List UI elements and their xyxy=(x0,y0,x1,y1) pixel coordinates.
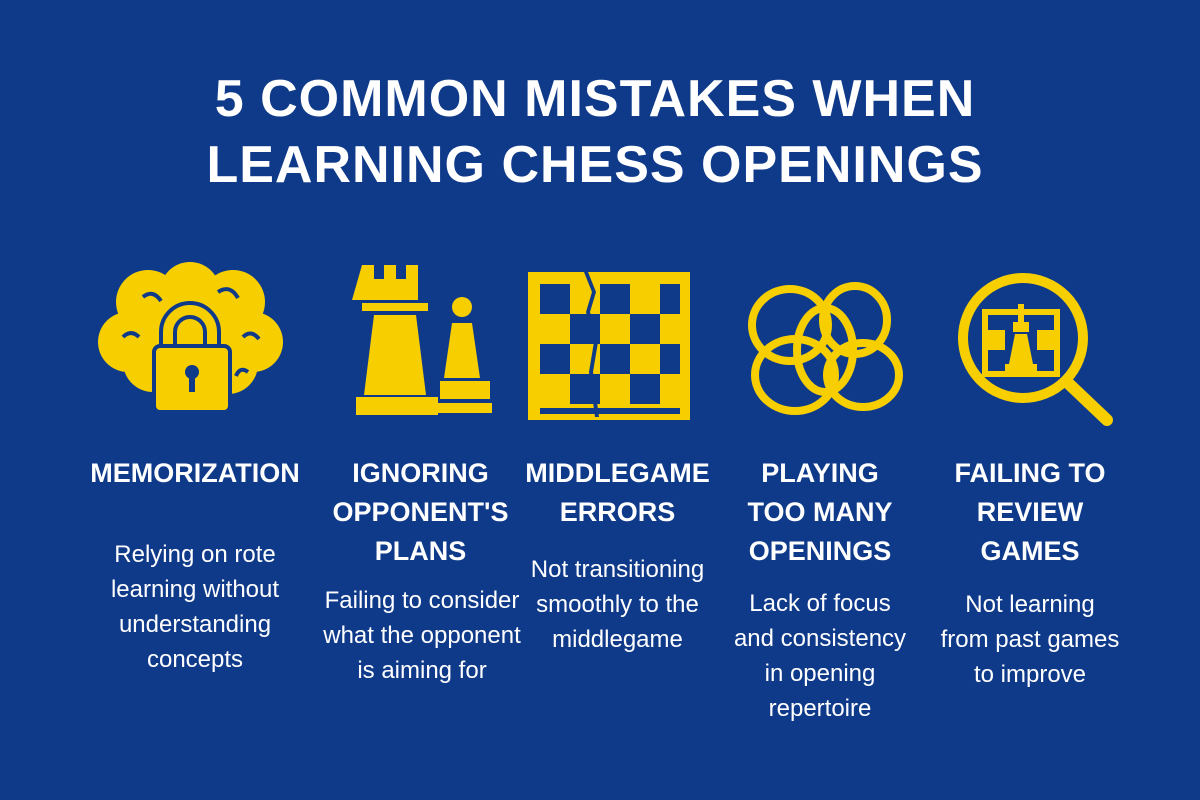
heading 1: MEMORIZATION xyxy=(90,458,300,488)
icon: brain with lock xyxy=(98,262,283,410)
heading 2 xyxy=(333,458,508,566)
title xyxy=(206,70,984,194)
icon: magnifier with chess king xyxy=(958,273,1113,426)
heading 3: ERRORS xyxy=(560,497,675,527)
icon: broken chessboard xyxy=(528,272,690,420)
title: 5 COMMON MISTAKES WHEN xyxy=(215,70,975,128)
text 4 xyxy=(734,590,906,722)
text 2 xyxy=(323,587,521,684)
heading 2: PLANS xyxy=(375,536,466,566)
text 4: in opening xyxy=(765,660,875,687)
icon: tangled loops xyxy=(748,282,903,415)
text 3 xyxy=(531,556,704,653)
column 5 xyxy=(954,458,1106,566)
heading 4: OPENINGS xyxy=(749,536,891,566)
text 3: Not transitioning xyxy=(531,556,704,583)
heading 5: FAILING TO xyxy=(954,458,1106,488)
text 4: and consistency xyxy=(734,625,906,652)
icon: rook and pawn xyxy=(352,265,492,415)
column 4 xyxy=(747,458,892,566)
text 2: Failing to consider xyxy=(325,587,519,614)
text 5: to improve xyxy=(974,661,1086,688)
heading 5: REVIEW xyxy=(977,497,1083,527)
text 3: middlegame xyxy=(552,626,683,653)
text 2: what the opponent xyxy=(323,622,521,649)
text 1 xyxy=(111,541,279,673)
text 3: smoothly to the xyxy=(536,591,699,618)
heading 4 xyxy=(747,458,892,566)
heading 5 xyxy=(954,458,1106,566)
heading 2: IGNORING xyxy=(352,458,489,488)
title: LEARNING CHESS OPENINGS xyxy=(206,136,984,194)
column 2 xyxy=(333,458,508,566)
text 4: Lack of focus xyxy=(749,590,891,617)
text 2: is aiming for xyxy=(357,657,487,684)
heading 5: GAMES xyxy=(980,536,1080,566)
heading 4: PLAYING xyxy=(761,458,879,488)
text 5 xyxy=(940,591,1119,688)
heading 3 xyxy=(525,458,710,527)
text 5: from past games xyxy=(941,626,1119,653)
heading 4: TOO MANY xyxy=(747,497,892,527)
text 1: understanding xyxy=(119,611,271,638)
text 4: repertoire xyxy=(769,695,871,722)
text 1: learning without xyxy=(111,576,279,603)
column 3 xyxy=(525,458,710,527)
text 5: Not learning xyxy=(965,591,1095,618)
heading 2: OPPONENT'S xyxy=(333,497,508,527)
text 1: concepts xyxy=(147,646,243,673)
text 1: Relying on rote xyxy=(114,541,276,568)
heading 3: MIDDLEGAME xyxy=(525,458,710,488)
